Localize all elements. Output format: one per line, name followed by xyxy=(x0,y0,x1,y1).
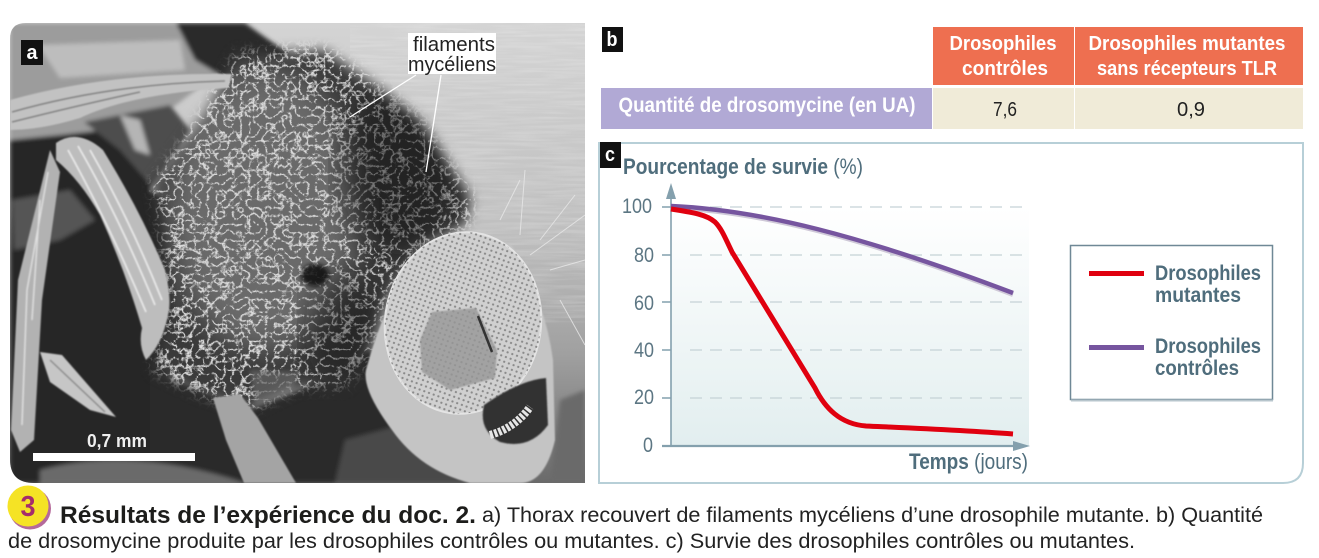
thorax xyxy=(145,41,479,416)
head xyxy=(366,235,555,483)
y tick labels xyxy=(622,195,654,457)
legend: contrôles xyxy=(1089,335,1261,380)
legend: mutantes: Drosophiles xyxy=(1155,262,1261,285)
fine hairs xyxy=(500,170,585,345)
line chart xyxy=(622,183,1030,457)
left leg xyxy=(11,150,60,452)
y axis title: Pourcentage de survie (%) xyxy=(623,154,863,179)
curve: mutantes xyxy=(671,209,1013,434)
panel b: drosomycin table xyxy=(601,27,1303,129)
panel c: survival chart xyxy=(599,142,1303,483)
compound eye xyxy=(384,231,542,415)
value: contrôles 7,6: 7,6 xyxy=(993,99,1017,121)
caption xyxy=(8,502,1263,553)
antenna cavity xyxy=(483,378,548,444)
caption: de drosomycine produite par les drosophiles contrôles ou mutantes. c) Survie des drosophiles contrôles ou mutantes. xyxy=(8,530,1135,553)
legend: contrôles: Drosophiles xyxy=(1155,335,1261,358)
scale bar 0,7 mm: 0,7 mm xyxy=(87,431,147,451)
annotation: filaments mycéliens xyxy=(350,33,496,172)
document number badge 3: 3 xyxy=(20,491,36,523)
annotation: filaments mycéliens: mycéliens xyxy=(408,54,496,76)
legend: mutantes: mutantes xyxy=(1155,284,1241,307)
label c xyxy=(600,142,621,168)
header: Drosophiles mutantes sans récepteurs TLR: Drosophiles mutantes xyxy=(1088,33,1286,55)
header: Drosophiles contrôles xyxy=(933,27,1074,85)
legend xyxy=(1070,246,1273,400)
row header: Quantité de drosomycine xyxy=(601,88,932,129)
document number badge 3 xyxy=(8,486,51,530)
header: Drosophiles contrôles: contrôles xyxy=(962,58,1048,80)
curve: contrôles xyxy=(671,208,1013,294)
lower centre leg xyxy=(213,394,296,483)
value: mutantes 0,9 xyxy=(1075,88,1303,129)
header: Drosophiles mutantes sans récepteurs TLR: sans récepteurs TLR xyxy=(1097,58,1277,80)
label a xyxy=(21,40,43,65)
label b xyxy=(602,27,623,52)
y tick labels: 60 xyxy=(634,292,654,315)
y tick labels: 20 xyxy=(634,386,654,409)
value: contrôles 7,6 xyxy=(933,88,1074,129)
y tick labels: 0 xyxy=(643,434,653,457)
y tick labels: 100 xyxy=(622,195,652,218)
x axis title: Temps (jours) xyxy=(909,449,1028,474)
y tick labels: 40 xyxy=(634,339,654,362)
legend: mutantes xyxy=(1089,262,1261,307)
upper hairy leg xyxy=(10,74,232,130)
scale bar 0,7 mm xyxy=(33,431,195,461)
caption: Résultats de l’expérience du doc. 2. xyxy=(60,502,476,529)
value: mutantes 0,9: 0,9 xyxy=(1177,99,1205,121)
annotation: filaments mycéliens: filaments xyxy=(413,34,495,56)
legend: contrôles: contrôles xyxy=(1155,357,1239,380)
large femur xyxy=(56,137,169,360)
header: Drosophiles mutantes sans récepteurs TLR xyxy=(1075,27,1303,85)
header: Drosophiles contrôles: Drosophiles xyxy=(950,33,1056,55)
row header: Quantité de drosomycine: Quantité de drosomycine (en UA) xyxy=(618,94,916,117)
label a: a xyxy=(26,42,38,64)
label b: b xyxy=(606,29,618,51)
caption: a) Thorax recouvert de filaments mycéliens d’une drosophile mutante. b) Quantité xyxy=(482,504,1263,527)
y tick labels: 80 xyxy=(634,244,654,267)
panel a: electron micrograph of mutant drosophila xyxy=(10,23,585,483)
small bristled leg xyxy=(40,352,116,417)
axis arrows xyxy=(666,183,1030,451)
label c: c xyxy=(605,144,615,166)
